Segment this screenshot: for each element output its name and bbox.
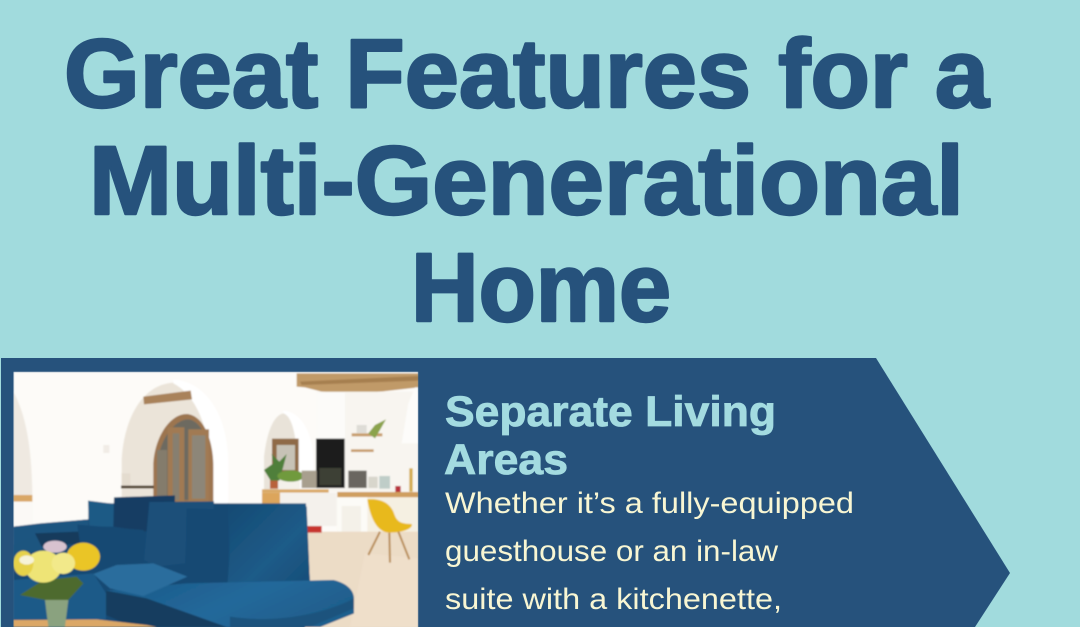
main arch interior (121, 382, 204, 498)
sofa seat (13, 573, 106, 619)
body text (445, 487, 854, 616)
kitchen wall (322, 390, 380, 396)
table (13, 619, 157, 627)
yellow chair (367, 499, 412, 533)
arched door (153, 414, 213, 503)
sofa cushion front (227, 503, 310, 585)
title: Multi-Generational (89, 126, 964, 235)
panel: separate living areas arrow (1, 358, 1010, 627)
second arch (264, 413, 298, 490)
body text: suite with a kitchenette, (445, 583, 782, 616)
heading: separate living areas (444, 388, 776, 484)
heading: separate living areas: Separate Living (445, 388, 776, 436)
photo: living room with blue sofa (13, 372, 418, 627)
sofa back (14, 519, 88, 548)
shelves (352, 433, 382, 436)
body text: Whether it’s a fully-equipped (445, 487, 854, 520)
title: Home (411, 233, 671, 342)
vase and flowers (45, 600, 68, 627)
sofa base (13, 502, 310, 624)
arrow background (1, 358, 1010, 627)
heading: separate living areas: Areas (444, 436, 568, 484)
floor (305, 532, 418, 627)
ovens (316, 439, 345, 488)
title: Great Features for a (64, 19, 990, 128)
ceiling beams (297, 373, 418, 395)
left arch (14, 394, 32, 496)
title (64, 19, 990, 342)
body text: guesthouse or an in-law (445, 535, 778, 568)
counter appliances (348, 471, 367, 488)
kitchen counters (262, 489, 329, 493)
plants (270, 480, 278, 489)
